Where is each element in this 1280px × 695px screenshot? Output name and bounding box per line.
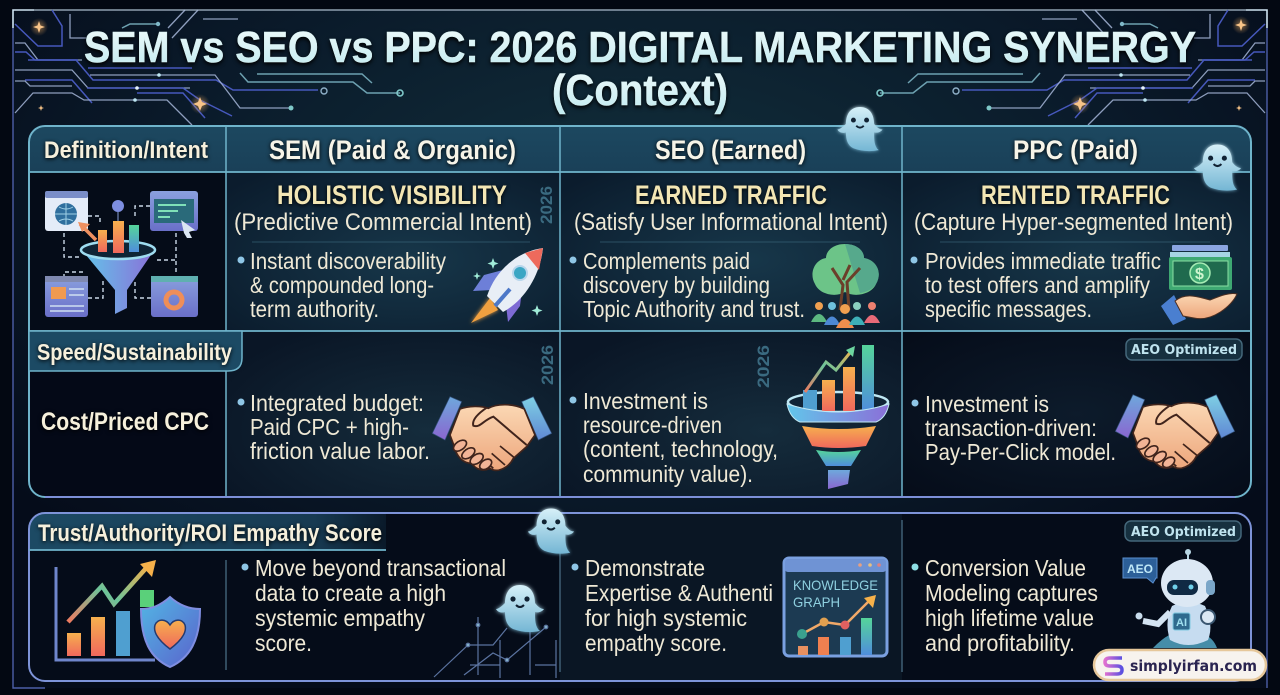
header labels [44, 135, 1138, 165]
circuit traces left [15, 10, 403, 125]
row 3: SEO text: empathy score. [585, 630, 727, 656]
row 1: SEM definition [234, 180, 532, 322]
row 2: SEO text: community value). [583, 461, 753, 487]
icon: knowledge graph window: GRAPH [793, 594, 840, 610]
row 2: SEM text [238, 390, 430, 464]
row 3: SEO text [572, 555, 773, 656]
row 2: PPC text [912, 391, 1116, 465]
row 1: PPC definition: RENTED TRAFFIC [981, 180, 1170, 210]
row 2: PPC text: transaction-driven: [925, 415, 1097, 441]
row 2: SEO text: (content, technology, [583, 436, 778, 462]
brand pill [1094, 650, 1266, 680]
icon: marketing funnel with windows [45, 191, 198, 317]
row 1: SEO definition: Topic Authority and trust. [583, 296, 805, 322]
orange sparks [30, 16, 1250, 114]
icon: knowledge graph window [784, 558, 887, 656]
row 2: SEM text: friction value labor. [250, 438, 430, 464]
AEO speech bubble: AEO [1127, 562, 1153, 576]
year tag: 2026 [537, 186, 556, 224]
year tag: 2026 [754, 345, 773, 388]
icon: AI robot [1136, 549, 1217, 648]
badge: AEO optimized: AEO Optimized [1131, 525, 1236, 540]
row 2: PPC text: Pay-Per-Click model. [925, 439, 1116, 465]
title [84, 23, 1196, 115]
title: (Context) [552, 66, 728, 115]
row 3: SEM text: data to create a high [255, 580, 446, 606]
row 3: SEO text: Expertise & Authenti [585, 580, 773, 606]
row 3: SEM text: Move beyond transactional [255, 555, 506, 581]
brand pill: simplyirfan.com [1130, 657, 1257, 675]
row 2: SEM text: Paid CPC + high- [250, 414, 409, 440]
row 3: SEO text: Demonstrate [585, 555, 705, 581]
row 3: SEM text: score. [255, 630, 312, 656]
row 2: SEO text [570, 388, 778, 487]
icon: money in hand [1161, 245, 1237, 325]
icon: tree and community [811, 244, 880, 328]
row 3: PPC text: and profitability. [925, 630, 1075, 656]
icon: network lines [434, 610, 556, 678]
ghost mascot right [1194, 144, 1241, 191]
row 1: SEM definition: term authority. [250, 296, 379, 322]
badge: AEO optimized [1126, 339, 1242, 360]
ghost mascot top [837, 107, 883, 151]
row 1: SEO definition [570, 180, 888, 322]
row 1: SEO definition: discovery by building [583, 272, 770, 298]
circuit traces right [877, 10, 1265, 125]
row 2: PPC text: Investment is [925, 391, 1049, 417]
row 1: SEM definition: Instant discoverability [250, 248, 446, 274]
icon: knowledge graph window: KNOWLEDGE [793, 577, 878, 593]
ghost mascot bottom [528, 508, 574, 554]
icon: handshake [1115, 395, 1235, 470]
row 1: SEO definition: Complements paid [583, 248, 750, 274]
icon: money in hand: $ [1195, 266, 1204, 283]
row 1: PPC definition: to test offers and amplify [925, 272, 1150, 298]
header labels: PPC (Paid) [1013, 135, 1138, 165]
row 1: PPC definition: specific messages. [925, 296, 1092, 322]
icon: handshake [432, 397, 552, 472]
trust panel heading: Trust/Authority/ROI Empathy Score [38, 520, 382, 547]
row 1: SEM definition: (Predictive Commercial Intent) [234, 209, 532, 236]
year tag: 2026 [538, 345, 557, 385]
header labels: SEM (Paid & Organic) [269, 135, 516, 165]
row 1: PPC definition: (Capture Hyper-segmented Intent) [914, 209, 1233, 236]
AEO speech bubble [1123, 558, 1157, 583]
row 1: SEO definition: (Satisfy User Informational Intent) [574, 209, 888, 236]
icon: AI robot: AI [1176, 617, 1187, 629]
speed/sustainability tab: Speed/Sustainability [37, 339, 232, 365]
header labels: Definition/Intent [44, 137, 208, 164]
row 3: SEM text: systemic empathy [255, 605, 425, 631]
speed/sustainability tab [29, 331, 242, 371]
row 2: SEO text: Investment is [583, 388, 708, 414]
badge: AEO optimized: AEO Optimized [1131, 343, 1237, 358]
row 1: SEO definition: EARNED TRAFFIC [635, 180, 827, 210]
row 3: SEO text: for high systemic [585, 605, 747, 631]
row 3: PPC text: Conversion Value [925, 555, 1086, 581]
icon: rocket [471, 248, 543, 323]
row 1: SEM definition: & compounded long- [250, 272, 434, 298]
icon: ghost on network [496, 585, 544, 632]
trust panel [29, 513, 1251, 681]
comparison table panel [29, 126, 1251, 497]
icon: rainbow funnel with chart [787, 345, 889, 489]
row 3: SEM text [242, 555, 506, 656]
row 1: PPC definition [910, 180, 1233, 322]
row 1: PPC definition: Provides immediate traffic [925, 248, 1161, 274]
row 2: SEO text: resource-driven [583, 412, 722, 438]
icon: growth chart with shield [56, 560, 200, 667]
row 3: PPC text: high lifetime value [925, 605, 1094, 631]
row 1: SEM definition: HOLISTIC VISIBILITY [277, 180, 507, 210]
row 2: SEM cost label: Cost/Priced CPC [41, 408, 209, 436]
row 3: PPC text [912, 555, 1098, 656]
row 3: PPC text: Modeling captures [925, 580, 1098, 606]
row 2: SEM text: Integrated budget: [250, 390, 424, 416]
header labels: SEO (Earned) [655, 135, 806, 165]
